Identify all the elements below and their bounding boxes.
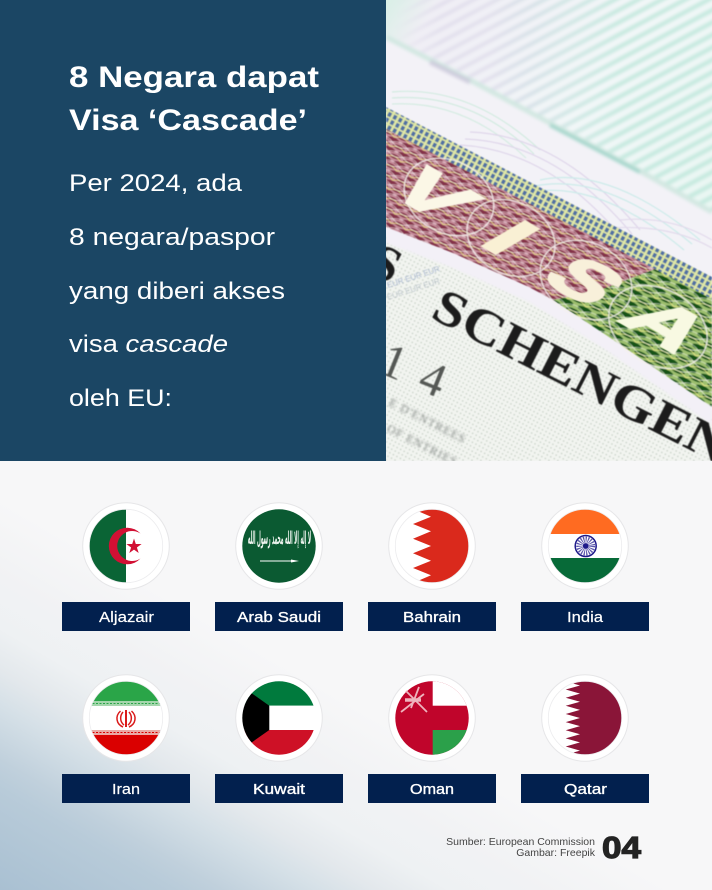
photo: EUR micro text [386, 266, 440, 300]
label: Arab Saudi [215, 602, 343, 631]
photo: D'ENTREES small print: E D'ENTREES [387, 395, 469, 446]
page number: 04 [602, 830, 642, 865]
photo: EUR micro text: EUR EUR EUR [386, 264, 441, 290]
photo: printed number 14: 1 [373, 333, 415, 391]
label: Iran: Iran [112, 781, 140, 798]
label: Oman [368, 774, 496, 803]
photo: D'ENTREES small print: OF ENTRIES [385, 421, 460, 469]
label: Qatar [521, 774, 649, 803]
source credit [446, 836, 596, 859]
photo: VISA letters: V [371, 158, 497, 231]
intro text block: oleh EU: [69, 385, 172, 412]
photo: printed number 14 [386, 347, 446, 397]
lower background panel [0, 461, 712, 890]
intro text block: 8 negara/paspor [69, 224, 275, 251]
label: Kuwait: Kuwait [253, 781, 306, 798]
intro text block [69, 170, 285, 412]
label: Bahrain: Bahrain [403, 609, 461, 626]
photo: VISA letters: I [464, 211, 556, 265]
label: Arab Saudi: Arab Saudi [237, 609, 321, 626]
label: India [521, 602, 649, 631]
photo: EUR micro text: EUR EUR EUR [386, 276, 441, 302]
flag: Arab Saudi [236, 503, 322, 589]
photo: blurred top fold of passport page [380, 0, 712, 216]
label: Aljazair: Aljazair [99, 609, 154, 626]
photo: VISA security band [386, 107, 712, 407]
photo: SCHENGEN printed word: SCHENGEN [424, 277, 712, 474]
label: Qatar: Qatar [564, 781, 607, 798]
panel: Schengen visa photo [361, 0, 712, 474]
flag: Aljazair [83, 503, 169, 589]
label: Bahrain [368, 602, 496, 631]
flag: Bahrain [389, 503, 475, 589]
intro text block: yang diberi akses [69, 278, 285, 305]
label: Oman: Oman [410, 781, 454, 798]
source credit: Gambar: Freepik [516, 847, 596, 859]
flag: Qatar [542, 675, 628, 761]
photo: VISA letters [404, 164, 698, 356]
photo: SCHENGEN printed word: S [361, 232, 411, 294]
label: Kuwait [215, 774, 343, 803]
heading [69, 61, 319, 137]
source credit: Sumber: European Commission [446, 836, 595, 848]
flag: Arab Saudi: لا إله إلا الله محمد رسول الله [248, 529, 311, 549]
photo: VISA letters: S [525, 246, 645, 316]
intro text block: Per 2024, ada [69, 170, 243, 197]
panel: navy title block [0, 0, 386, 461]
photo: SCHENGEN printed word [386, 246, 712, 461]
heading: 8 Negara dapat [69, 61, 319, 94]
flag: Iran [83, 675, 169, 761]
flag: India [542, 503, 628, 589]
flag: Oman [389, 675, 475, 761]
flag: Kuwait [236, 675, 322, 761]
label: Aljazair [62, 602, 190, 631]
photo: white margin below the VISA band [386, 226, 712, 425]
label: India: India [567, 609, 604, 626]
photo: pale guilloche arcs [392, 91, 712, 250]
heading: Visa ‘Cascade’ [69, 104, 307, 137]
intro text block: visa cascade [69, 331, 228, 358]
photo: lower mesh of visa sticker [386, 235, 712, 461]
photo: printed number 14: 4 [412, 350, 454, 408]
label: Iran [62, 774, 190, 803]
